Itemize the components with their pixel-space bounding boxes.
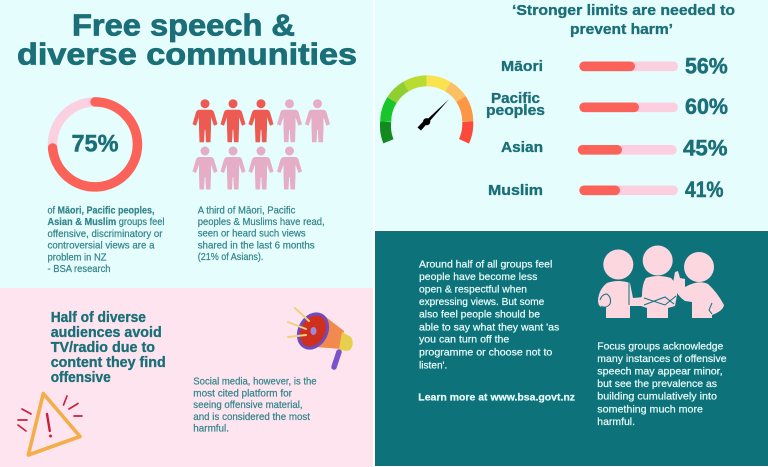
row: Asian — [501, 136, 728, 160]
donut chart: 75% — [52, 102, 138, 187]
row: Pacific peoples: peoples — [486, 102, 545, 119]
chart: bars — [486, 54, 728, 202]
panel: stronger limits — [375, 0, 768, 230]
panel: audiences — [0, 288, 373, 467]
icon: warning triangle — [18, 394, 82, 455]
text: a third: (21% of Asians). — [198, 252, 263, 263]
heading: stronger limits: prevent harm’ — [570, 21, 673, 38]
text: 75% description — [48, 206, 164, 275]
heading: half of diverse audiences: content they find — [51, 354, 166, 371]
row: Pacific peoples: Pacific — [491, 90, 540, 107]
text: social media — [193, 376, 317, 434]
gauge icon — [385, 81, 468, 141]
text: 75% description: - BSA research — [48, 264, 111, 275]
text: around half: open & respectful when — [419, 285, 527, 296]
text: focus groups: many instances of offensive — [597, 354, 727, 365]
row: Muslim: Muslim — [488, 182, 543, 199]
heading: half of diverse audiences: TV/radio due to — [51, 339, 155, 356]
text: focus groups: building cumulatively into — [597, 392, 717, 403]
figure: middle person — [640, 276, 677, 318]
text: around half: listen'. — [419, 360, 447, 371]
text: focus groups: something much more — [597, 405, 703, 416]
text: focus groups: but see the prevalence as — [597, 379, 717, 390]
text: a third — [198, 206, 325, 263]
text: a third: A third of Māori, Pacific — [198, 206, 295, 216]
icon: megaphone — [288, 308, 353, 367]
title: Free speech & — [72, 8, 295, 43]
text: around half: you can turn off the — [419, 335, 510, 346]
text: a third: shared in the last 6 months — [198, 240, 315, 251]
text: focus groups: harmful. — [597, 417, 635, 428]
text: social media: Social media, however, is the — [193, 376, 317, 388]
heading: half of diverse audiences: Half of diverse — [51, 309, 146, 326]
text: a third: peoples & Muslims have read, — [198, 217, 325, 228]
donut chart: 75%: 75% — [72, 130, 118, 158]
row: Māori — [501, 54, 728, 78]
heading: half of diverse audiences: audiences avoid — [51, 324, 162, 341]
text: 75% description: problem in NZ — [48, 252, 106, 263]
text: around half — [419, 259, 559, 371]
text: 75% description: of Māori, Pacific peoples, — [48, 206, 155, 216]
panel: teal focus groups — [375, 231, 768, 466]
figure: left person — [598, 281, 646, 318]
row: Pacific peoples: 60% — [685, 94, 728, 119]
row: Asian: 45% — [683, 136, 728, 160]
row: Pacific peoples — [486, 90, 728, 119]
heading: half of diverse audiences — [51, 309, 166, 386]
row: Asian: Asian — [501, 139, 543, 156]
title — [17, 8, 357, 71]
text: around half: expressing views. But some — [419, 297, 545, 308]
icon: three people — [598, 246, 724, 318]
pictogram: one third of people — [192, 99, 330, 190]
text: social media: and is considered the most — [193, 412, 310, 423]
text: social media: harmful. — [193, 424, 229, 434]
heading: half of diverse audiences: offensive — [51, 369, 111, 386]
text: 75% description: offensive, discriminatory or — [48, 229, 163, 240]
text: around half: Around half of all groups feel — [419, 259, 552, 270]
text: 75% description: controversial views are a — [48, 240, 155, 252]
text: 75% description: Asian & Muslim groups feel — [48, 217, 164, 228]
row: Māori: Māori — [501, 58, 543, 75]
text: around half: programme or choose not to — [419, 347, 553, 358]
text: around half: able to say what they want 'as — [419, 323, 559, 334]
link: learn more: Learn more at www.bsa.govt.nz — [418, 392, 575, 403]
text: a third: seen or heard such views — [198, 228, 306, 240]
text: around half: also feel people should be — [419, 310, 540, 321]
panel: free speech — [0, 0, 373, 288]
text: social media: most cited platform for — [193, 388, 293, 399]
text: focus groups: speech may appear minor, — [597, 367, 723, 378]
row: Muslim: 41% — [685, 177, 724, 202]
text: focus groups: Focus groups acknowledge — [597, 341, 724, 352]
text: focus groups — [597, 341, 727, 428]
heading: stronger limits: ‘Stronger limits are needed to — [512, 2, 735, 19]
row: Muslim — [488, 177, 724, 202]
heading: stronger limits — [512, 2, 735, 38]
row: Māori: 56% — [685, 54, 728, 78]
text: around half: people have become less — [419, 272, 537, 283]
title: diverse communities — [17, 36, 357, 71]
figure: right person — [673, 271, 724, 318]
text: social media: seeing offensive material, — [193, 400, 303, 411]
